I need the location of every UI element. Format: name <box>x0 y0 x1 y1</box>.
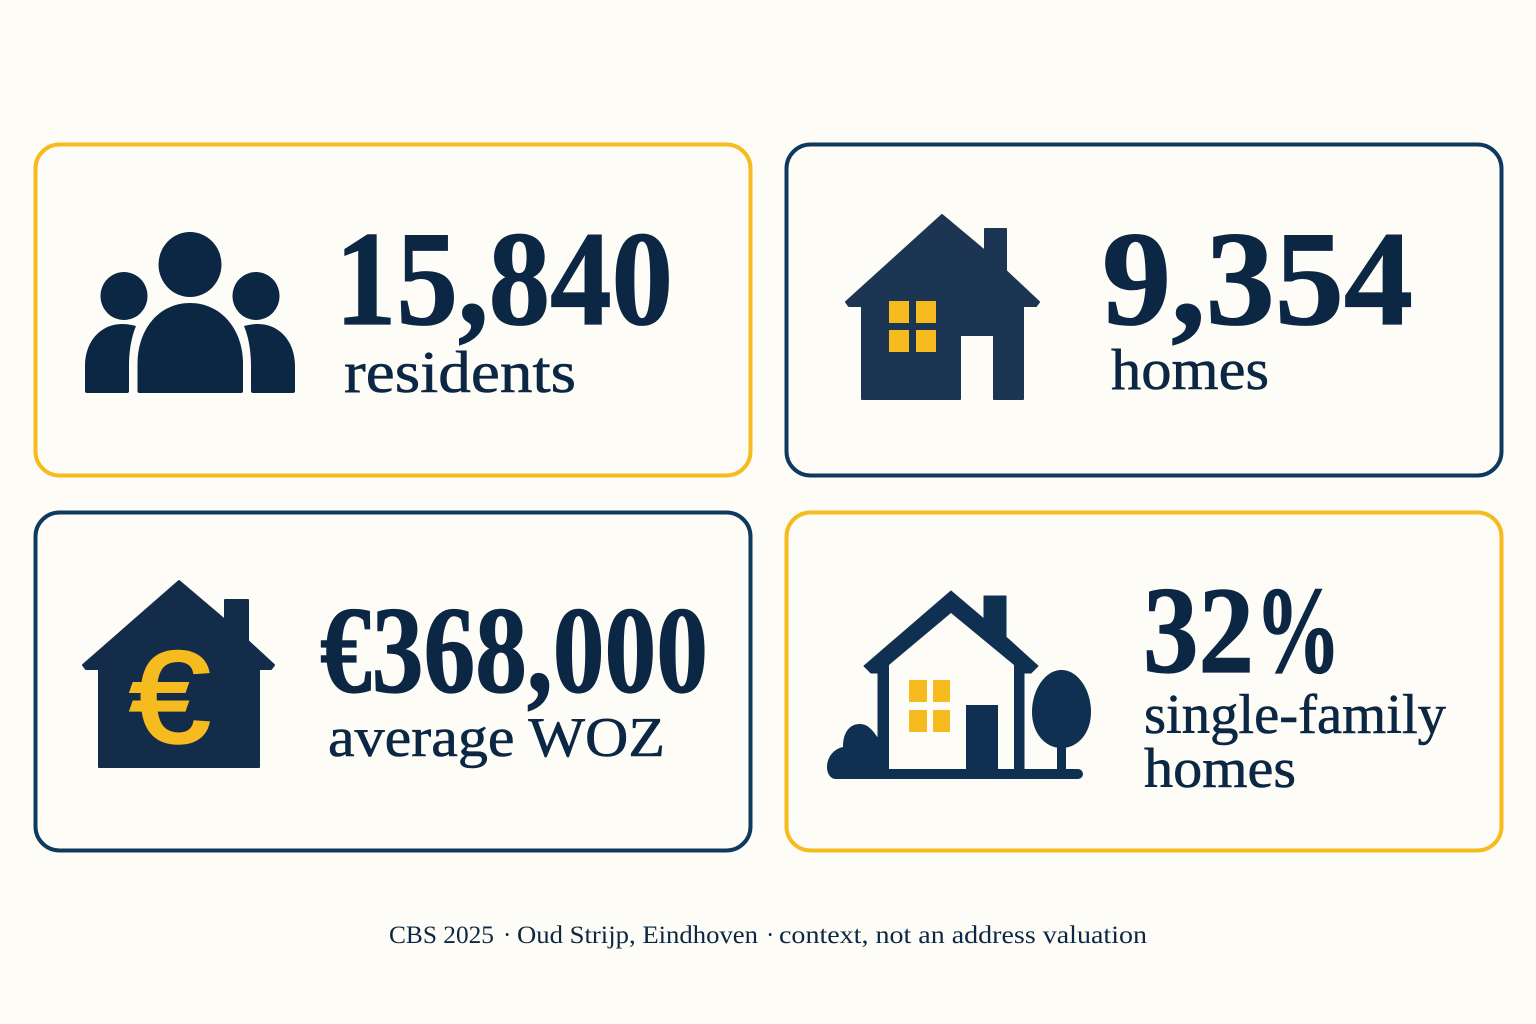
footer source note: Oud Strijp, Eindhoven <box>517 922 759 949</box>
footer source note: context, not an address valuation <box>779 922 1148 949</box>
label: single-family homes: homes <box>1144 738 1296 800</box>
label: single-family homes <box>1144 684 1446 800</box>
footer source note: CBS 2025 <box>389 922 494 949</box>
footer source note: · <box>503 922 511 949</box>
footer source note: · <box>766 922 774 949</box>
number: €368,000: €368,000 <box>320 582 708 719</box>
panel: residents <box>36 144 750 476</box>
icon: house with euro: € <box>130 624 210 770</box>
label: average WOZ: average WOZ <box>328 707 665 769</box>
panel: single-family homes <box>786 512 1502 850</box>
number: 32%: 32 <box>1143 562 1254 699</box>
number: 32%: % <box>1255 562 1341 699</box>
number: 15,840: 15,840 <box>335 205 673 354</box>
label: single-family homes: single-family <box>1144 684 1446 746</box>
icon: outlined house with tree <box>827 591 1091 779</box>
label: residents: residents <box>344 339 576 405</box>
icon: people <box>85 232 295 393</box>
number: 9,354: 9,354 <box>1102 205 1413 354</box>
panel: homes <box>786 144 1502 476</box>
footer source note <box>389 922 1148 949</box>
icon: house with euro <box>83 581 274 770</box>
panel: average WOZ <box>36 512 750 850</box>
icon: house with window <box>846 215 1039 399</box>
label: homes: homes <box>1111 337 1269 402</box>
